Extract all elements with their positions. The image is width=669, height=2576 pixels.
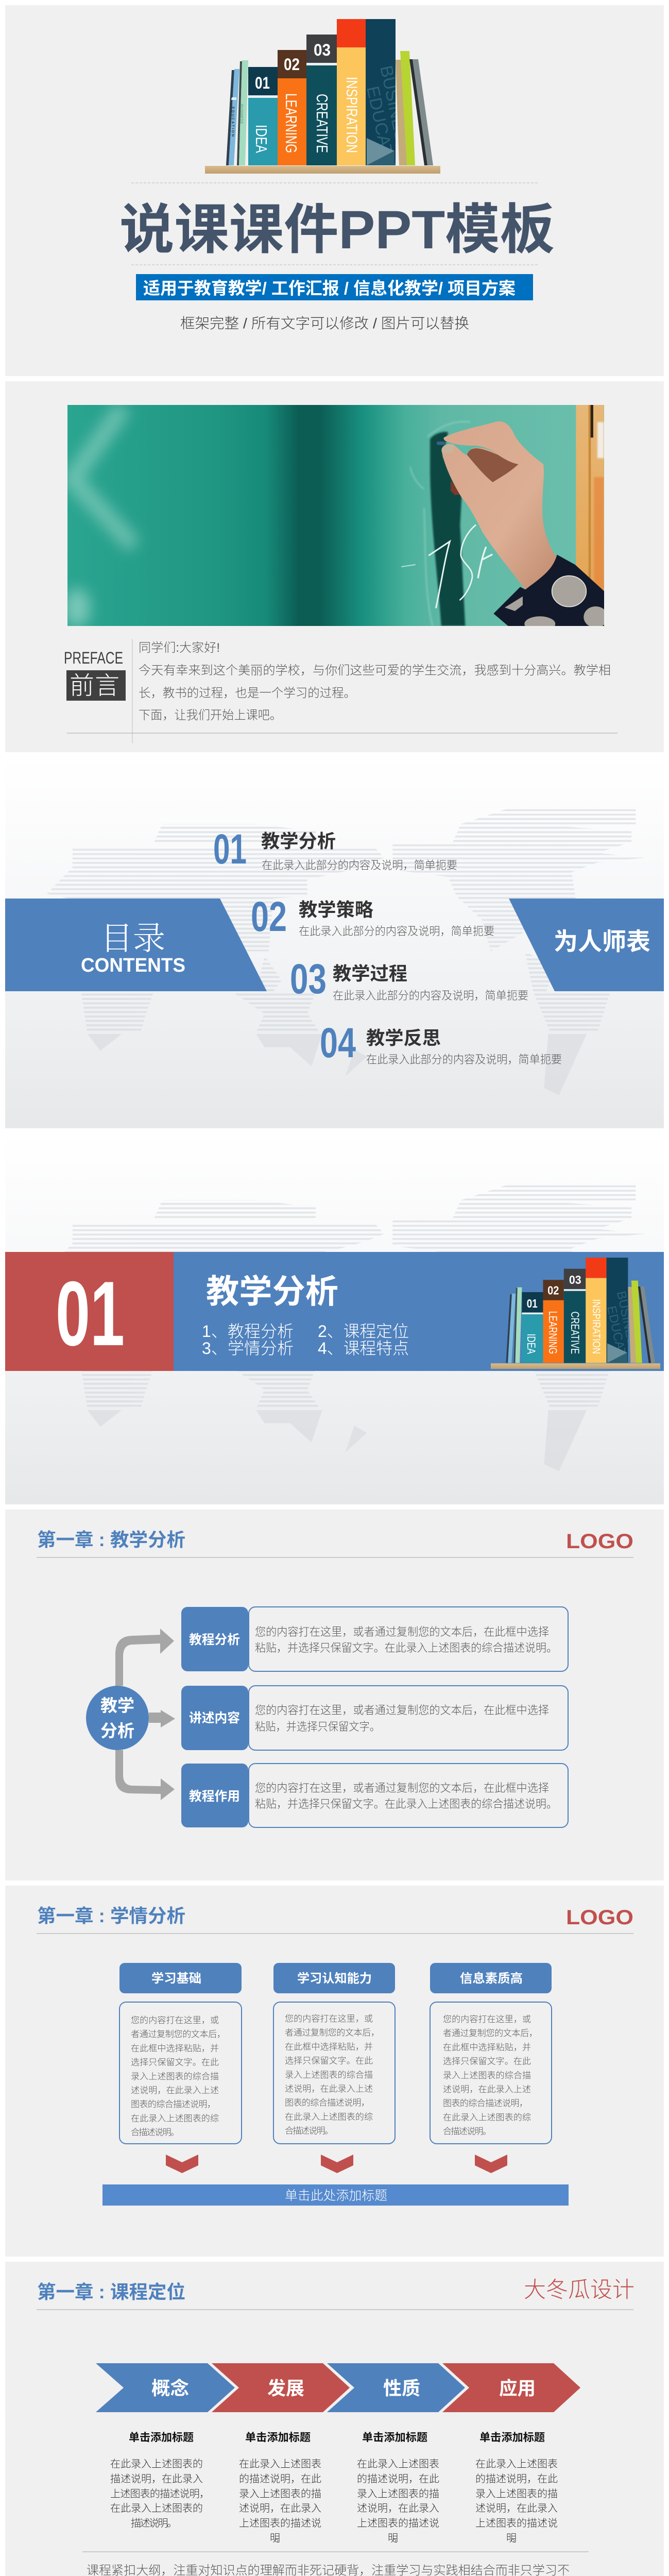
banner: blue band [174, 1252, 664, 1371]
column 4 text: 录入上述图表的描 [475, 2488, 558, 2500]
illustration: bookshelf: 03 [314, 41, 331, 59]
column 3: 录入上述图表的综合描 [443, 2071, 531, 2080]
arrow: to row 2 [149, 1710, 175, 1727]
preface text: 下面，让我们开始上课吧。 [139, 708, 282, 722]
panel: learner analysis slide [5, 1886, 664, 2257]
item 02: 教学策略 [299, 899, 373, 920]
column 2 text: 明。 [270, 2533, 285, 2544]
heading: preface: 前言 [70, 672, 119, 700]
panel: cover slide [5, 5, 664, 376]
column 2 text: 的描述说明，在此 [239, 2473, 321, 2485]
illustration: small bookshelf: BUSINESS [614, 1290, 641, 1355]
panel: teaching analysis slide [5, 1510, 664, 1880]
banner: contents: 目录 [100, 912, 165, 959]
item 01: 教学分析 [261, 831, 336, 852]
row 1: 您的内容打在这里，或者通过复制您的文本后，在此框中选择 [255, 1625, 549, 1638]
column 2: 述说明，在此录入上述 [285, 2084, 373, 2094]
illustration: small bookshelf: CREATIVE [569, 1311, 581, 1354]
illustration: small bookshelf: 03 [569, 1273, 581, 1286]
column 2 text: 述说明，在此录入 [239, 2502, 321, 2514]
illustration: bookshelf: 02 [284, 55, 300, 74]
hub oval [86, 1686, 149, 1750]
item 03 [290, 956, 528, 1003]
column 2: 合描述说明。 [285, 2126, 333, 2136]
hub oval: 教学 [100, 1696, 134, 1715]
item 03: 03 [290, 956, 327, 1003]
chevron: concept [96, 2363, 235, 2412]
panel: section 01 divider [5, 1185, 664, 1504]
column 1: 在此录入上述图表的综 [131, 2113, 219, 2123]
column 1 text [110, 2432, 210, 2529]
column 3: 述说明，在此录入上述 [443, 2084, 531, 2094]
logo: LOGO [566, 1906, 633, 1929]
logo: LOGO [566, 1530, 633, 1553]
chevron arrow 3 [475, 2155, 507, 2173]
chevron: concept: 概念 [151, 2378, 189, 2399]
chevron: application [442, 2363, 580, 2412]
column 4 text: 述说明，在此录入 [475, 2502, 558, 2514]
column 3: 者通过复制您的文本后， [443, 2028, 538, 2038]
heading: preface: PREFACE [64, 649, 123, 667]
arrow: to row 3 [115, 1750, 175, 1800]
item 01 [213, 826, 457, 873]
column 2 text: 在此录入上述图表 [239, 2458, 321, 2470]
title: 说课课件PPT模板 [119, 200, 555, 260]
banner: motto: 为人师表 [554, 928, 650, 955]
column 1: 录入上述图表的综合描 [131, 2072, 219, 2081]
column 3 [430, 1963, 552, 2144]
illustration: bookshelf: EDUCATION [363, 84, 403, 188]
illustration: bookshelf: BUSINESS [239, 104, 243, 124]
column 2 [273, 1963, 395, 2144]
column 1 text: 在此录入上述图表的 [110, 2502, 203, 2514]
section heading: 教学分析 [206, 1273, 338, 1310]
column 3: 图表的综合描述说明， [443, 2098, 528, 2108]
column 1 text: 描述说明。 [131, 2517, 177, 2529]
section list: 1、教程分析 [202, 1322, 294, 1341]
summary bar: 单击此处添加标题 [285, 2189, 387, 2203]
illustration: bookshelf: 01 [255, 74, 270, 92]
column 3 text: 明。 [388, 2533, 403, 2544]
column 1 text: 上述图表的描述说明， [110, 2488, 210, 2500]
section list: 3、学情分析 [202, 1339, 294, 1358]
column 1: 选择只保留文字。在此 [131, 2058, 219, 2067]
column 1: 学习基础 [151, 1972, 201, 1986]
chevron arrow 1 [166, 2155, 198, 2173]
item 02: 在此录入此部分的内容及说明，简单扼要 [299, 925, 494, 938]
heading: 第一章 : 教学分析 [37, 1529, 185, 1550]
row 2: 讲述内容 [189, 1710, 240, 1725]
section list: 2、课程定位 [318, 1322, 409, 1341]
column 2 text [239, 2432, 321, 2544]
illustration: small bookshelf: 02 [547, 1283, 559, 1297]
column 2: 者通过复制您的文本后， [285, 2028, 380, 2038]
column 3 text: 录入上述图表的描 [357, 2488, 439, 2500]
column 2: 图表的综合描述说明， [285, 2098, 370, 2108]
item 02 [251, 893, 494, 940]
number block: 01 [56, 1262, 125, 1365]
column 2 text: 上述图表的描述说 [239, 2517, 321, 2529]
column 2: 在此录入上述图表的综 [285, 2112, 373, 2122]
row 1: 教程分析 [189, 1633, 240, 1647]
column 1: 图表的综合描述说明， [131, 2099, 216, 2109]
preface text [139, 641, 611, 722]
panel: preface slide [5, 381, 664, 752]
illustration: bookshelf: CREATIVE [313, 94, 331, 153]
row 2: 您的内容打在这里，或者通过复制您的文本后，在此框中选择 [255, 1704, 549, 1717]
illustration: small bookshelf: LEARNING [546, 1311, 559, 1354]
column 3 text: 在此录入上述图表 [357, 2458, 439, 2470]
column 4 text: 的描述说明，在此 [475, 2473, 558, 2485]
illustration: bookshelf [205, 19, 440, 188]
column 3 text: 上述图表的描述说 [357, 2517, 439, 2529]
arrow: to row 1 [115, 1629, 174, 1686]
column 3: 选择只保留文字。在此 [443, 2057, 531, 2066]
heading: 第一章 : 课程定位 [37, 2281, 185, 2302]
column 3: 在此框中选择粘贴，并 [443, 2042, 531, 2052]
subtitle bar: 适用于教育教学/ 工作汇报 / 信息化教学/ 项目方案 [143, 279, 516, 298]
photo: hand writing on chalkboard [64, 405, 608, 632]
column 4 text [475, 2432, 558, 2544]
hub oval: 分析 [100, 1721, 134, 1740]
row 2 [181, 1686, 568, 1750]
section list [202, 1322, 409, 1358]
column 3 text: 的描述说明，在此 [357, 2473, 439, 2485]
preface text: 长，教书的过程，也是一个学习的过程。 [139, 686, 356, 700]
item 04 [320, 1020, 562, 1066]
banner: contents [5, 899, 267, 991]
illustration: bookshelf: IDEA [252, 125, 270, 153]
item 01: 01 [213, 826, 247, 873]
column 1 text: 单击添加标题 [129, 2432, 194, 2444]
number block [5, 1252, 174, 1371]
illustration: bookshelf: LEARNING [282, 93, 300, 153]
chevron: application: 应用 [499, 2378, 536, 2399]
column 3 text [357, 2432, 439, 2544]
column 1 [119, 1963, 242, 2144]
column 2 text: 单击添加标题 [245, 2432, 311, 2444]
column 4 text: 上述图表的描述说 [475, 2517, 558, 2529]
tagline: 框架完整 / 所有文字可以修改 / 图片可以替换 [180, 315, 469, 331]
item 01: 在此录入此部分的内容及说明，简单扼要 [262, 859, 457, 872]
column 1: 述说明，在此录入上述 [131, 2086, 219, 2095]
banner: contents: CONTENTS [81, 955, 185, 976]
column 1 text: 描述说明，在此录入 [110, 2473, 203, 2485]
chevron: nature [327, 2363, 465, 2412]
column 2: 在此框中选择粘贴，并 [285, 2042, 373, 2052]
column 2: 录入上述图表的综合描 [285, 2070, 373, 2080]
panel: course positioning slide [5, 2262, 664, 2576]
illustration: bookshelf: EDUCATION [231, 107, 234, 137]
column 3 text: 单击添加标题 [362, 2432, 427, 2444]
column 2: 您的内容打在这里，或 [285, 2014, 373, 2024]
row 3: 教程作用 [189, 1789, 240, 1804]
row 1: 粘贴，并选择只保留文字。在此录入上述图表的综合描述说明。 [255, 1641, 557, 1654]
column 3: 您的内容打在这里，或 [443, 2014, 531, 2024]
row 3 [181, 1764, 568, 1827]
chevron arrow 2 [321, 2155, 353, 2173]
column 1: 在此框中选择粘贴，并 [131, 2043, 219, 2053]
summary bar [102, 2184, 569, 2206]
panel: contents slide [5, 809, 664, 1128]
section list: 4、课程特点 [318, 1339, 409, 1358]
illustration: small bookshelf: 01 [527, 1297, 538, 1310]
column 4 text: 单击添加标题 [479, 2432, 545, 2444]
illustration: small bookshelf: INSPIRATION [590, 1299, 603, 1354]
item 04: 04 [320, 1020, 356, 1066]
illustration: bookshelf: BUSINESS [376, 64, 414, 155]
heading: 第一章 : 学情分析 [37, 1905, 185, 1926]
item 03: 在此录入此部分的内容及说明，简单扼要 [333, 989, 528, 1002]
column 3: 在此录入上述图表的综 [443, 2112, 531, 2122]
item 04: 教学反思 [366, 1027, 441, 1048]
illustration: small bookshelf: EDUCATION [604, 1304, 633, 1379]
row 3: 粘贴，并选择只保留文字。在此录入上述图表的综合描述说明。 [255, 1798, 557, 1810]
chevron: development [212, 2363, 350, 2412]
illustration: bookshelf: INSPIRATION [343, 77, 360, 153]
row 1 [181, 1607, 568, 1671]
chevron: nature: 性质 [383, 2378, 420, 2399]
preface text: 同学们:大家好! [139, 641, 220, 655]
chevron: development: 发展 [267, 2378, 304, 2399]
item 02: 02 [251, 893, 287, 940]
column 1 text: 在此录入上述图表的 [110, 2458, 203, 2470]
column 3: 合描述说明。 [443, 2127, 491, 2137]
column 1: 者通过复制您的文本后， [131, 2029, 226, 2039]
column 3 text: 述说明，在此录入 [357, 2502, 439, 2514]
background world map [47, 1184, 644, 1471]
column 1: 合描述说明。 [131, 2128, 179, 2138]
column 1: 您的内容打在这里，或 [131, 2015, 219, 2025]
item 03: 教学过程 [333, 963, 407, 984]
banner: motto [509, 899, 664, 991]
subtitle bar [136, 274, 533, 300]
heading: preface [64, 649, 126, 701]
column 4 text: 明。 [506, 2533, 521, 2544]
row 2: 粘贴，并选择只保留文字。 [255, 1720, 380, 1733]
item 04: 在此录入此部分的内容及说明，简单扼要 [366, 1053, 562, 1066]
illustration: small bookshelf [491, 1258, 660, 1379]
brand: 大冬瓜设计 [524, 2278, 634, 2302]
row 3: 您的内容打在这里，或者通过复制您的文本后，在此框中选择 [255, 1782, 549, 1794]
column 4 text: 在此录入上述图表 [475, 2458, 558, 2470]
column 2 text: 录入上述图表的描 [239, 2488, 321, 2500]
column 2: 学习认知能力 [297, 1972, 372, 1986]
column 2: 选择只保留文字。在此 [285, 2056, 373, 2066]
preface text: 今天有幸来到这个美丽的学校，与你们这些可爱的学生交流，我感到十分高兴。教学相 [139, 664, 611, 677]
column 3: 信息素质高 [460, 1972, 523, 1986]
illustration: small bookshelf: IDEA [525, 1334, 538, 1354]
background world map [47, 808, 644, 1095]
